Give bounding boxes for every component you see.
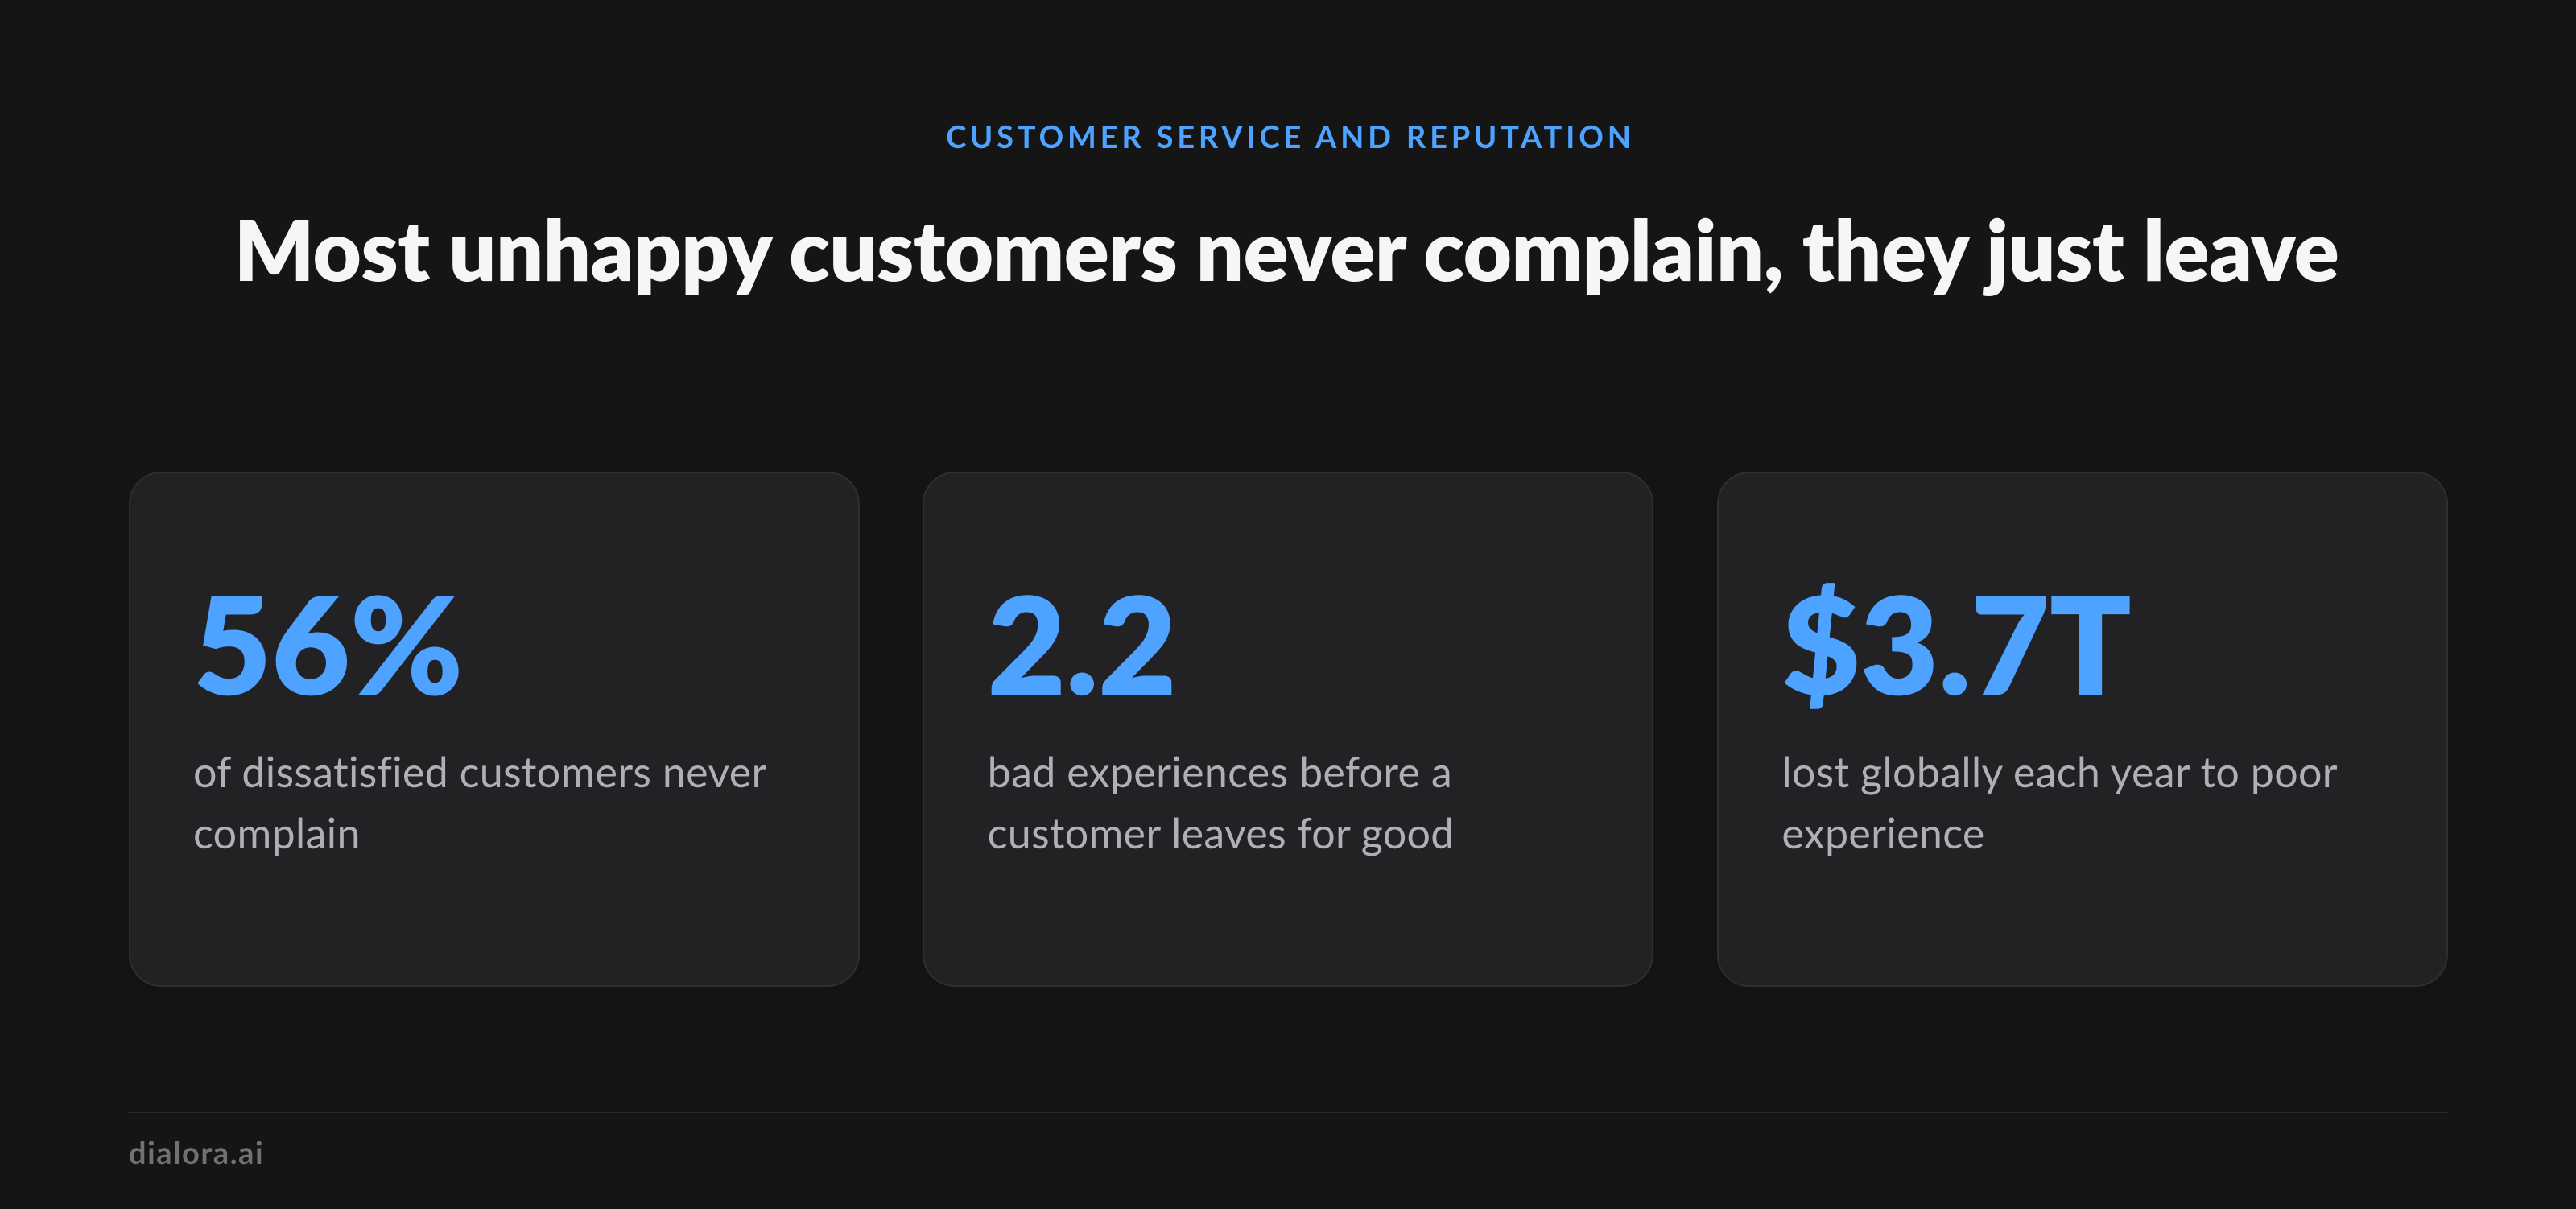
stat description: experience — [1781, 808, 1985, 858]
stat number: $3.7T: $3.7T — [1781, 561, 2132, 724]
panel: $3.7T stat card — [1717, 472, 2448, 987]
stat description — [1781, 747, 2338, 858]
stat description — [193, 747, 767, 858]
stat description: lost globally each year to poor — [1781, 747, 2338, 797]
stat description — [988, 747, 1455, 858]
eyebrow heading: CUSTOMER SERVICE AND REPUTATION — [946, 118, 1635, 155]
footer brand: dialora.ai — [129, 1134, 264, 1171]
stat description: of dissatisfied customers never — [193, 747, 767, 797]
stat description: complain — [193, 808, 361, 858]
stat description: customer leaves for good — [988, 808, 1455, 858]
panel: 2.2 stat card — [923, 472, 1653, 987]
stat number: 56%: 56% — [193, 561, 463, 724]
title: Most unhappy customers never complain, they just leave — [234, 199, 2339, 299]
stat description: bad experiences before a — [988, 747, 1452, 797]
stat number: 2.2: 2.2 — [988, 561, 1177, 724]
panel: 56% stat card — [129, 472, 860, 987]
